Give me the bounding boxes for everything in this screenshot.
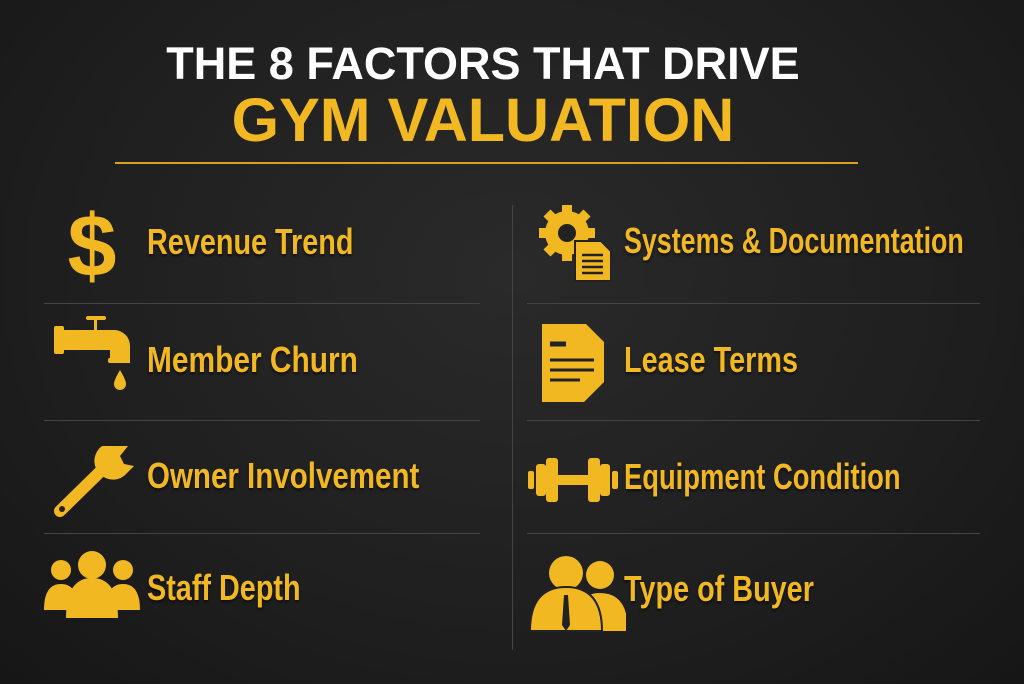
- icon: staff group: [44, 551, 140, 618]
- label: Owner Involvement: Owner Involvement: [147, 455, 419, 496]
- label: Type of Buyer: Type of Buyer: [624, 568, 814, 609]
- icon: dumbbell: [528, 458, 618, 502]
- subtitle: GYM VALUATION: [232, 86, 734, 154]
- label: Equipment Condition: Equipment Condition: [624, 456, 901, 497]
- icon: document: [542, 324, 604, 402]
- icon: faucet: [54, 316, 130, 390]
- title: THE 8 FACTORS THAT DRIVE: [166, 38, 800, 89]
- icon: buyers: [531, 556, 626, 631]
- label: Staff Depth: Staff Depth: [147, 567, 301, 608]
- label: Lease Terms: Lease Terms: [624, 339, 798, 380]
- label: Revenue Trend: Revenue Trend: [147, 221, 353, 262]
- label: Systems & Documentation: Systems & Documentation: [624, 220, 964, 261]
- icon: wrench: [54, 446, 134, 517]
- label: Member Churn: Member Churn: [147, 339, 358, 380]
- icon: gear and doc: [539, 205, 610, 280]
- title underline: [115, 162, 858, 164]
